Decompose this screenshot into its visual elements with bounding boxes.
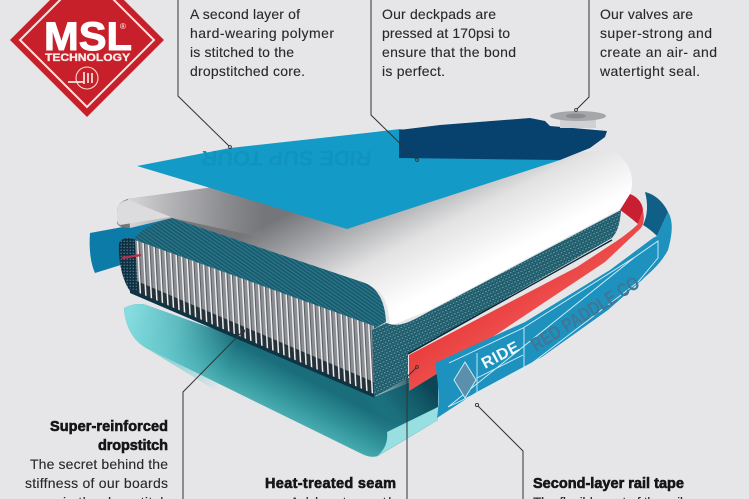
panel: deck layer: RIDE SUP TOUR <box>201 146 372 169</box>
logo: MSL Technology badge <box>10 0 164 117</box>
logo: MSL Technology badge: MSL <box>44 15 132 59</box>
callout: deck layer text: A second layer of <box>190 6 300 22</box>
callout: deck layer text <box>190 0 334 79</box>
callout: deckpads text <box>382 0 516 79</box>
panel: dropstitch core mesh top <box>133 218 386 330</box>
callout: seam text <box>265 476 396 499</box>
panel: bottom teal layer <box>124 304 438 457</box>
panel: left end of blue rail tape <box>90 218 200 273</box>
callout: valves text: Our valves are <box>600 6 693 22</box>
arrow: rail tape leader <box>475 403 523 499</box>
arrow: deck leader <box>178 0 231 148</box>
logo: MSL Technology badge: ® <box>120 22 126 31</box>
panel: blue rail tape <box>435 192 672 418</box>
panel: dropstitch core mesh end and base <box>119 238 375 398</box>
icon: valve <box>550 111 606 128</box>
arrow: seam leader <box>407 366 418 499</box>
callout: deckpads text: pressed at 170psi to <box>382 25 510 41</box>
panel: red rail tape <box>408 194 644 391</box>
arrow: deckpad leader <box>371 0 418 161</box>
panel: deck layer <box>137 129 560 229</box>
panel: white PVC layer <box>117 150 632 326</box>
callout: deckpads text: is perfect. <box>382 63 445 79</box>
callout: deckpads text: Our deckpads are <box>382 6 496 22</box>
panel: blue rail tape: RIDE <box>479 339 522 373</box>
callout: deck layer text: is stitched to the <box>190 44 294 60</box>
panel: blue rail tape: RED PADDLE CO <box>528 273 644 356</box>
callout: rail tape text: Second-layer rail tape <box>533 476 684 492</box>
callout: valves text: create an air- and <box>600 44 717 60</box>
callout: deck layer text: hard-wearing polymer <box>190 25 334 41</box>
callout: deck layer text: dropstitched core. <box>190 63 305 79</box>
panel: dark deckpad <box>399 118 607 160</box>
panel: mesh side band <box>372 210 621 397</box>
callout: dropstitch text: stiffness of our boards <box>25 475 168 491</box>
arrow: dropstitch leader <box>183 329 245 499</box>
callout: valves text <box>599 0 717 79</box>
callout: seam text: Heat-treated seam <box>265 476 396 492</box>
callout: valves text: watertight seal. <box>599 63 700 79</box>
logo: MSL Technology badge: TECHNOLOGY <box>45 52 131 64</box>
arrow: valve leader <box>575 0 589 111</box>
callout: rail tape text <box>533 476 684 499</box>
callout: dropstitch text: dropstitch <box>98 438 168 454</box>
panel: dropstitch threads <box>132 240 374 396</box>
callout: dropstitch text: The secret behind the <box>30 456 168 472</box>
callout: deckpads text: ensure that the bond <box>382 44 516 60</box>
callout: valves text: super-strong and <box>600 25 712 41</box>
callout: dropstitch text <box>25 419 168 499</box>
callout: dropstitch text: Super-reinforced <box>50 419 168 435</box>
